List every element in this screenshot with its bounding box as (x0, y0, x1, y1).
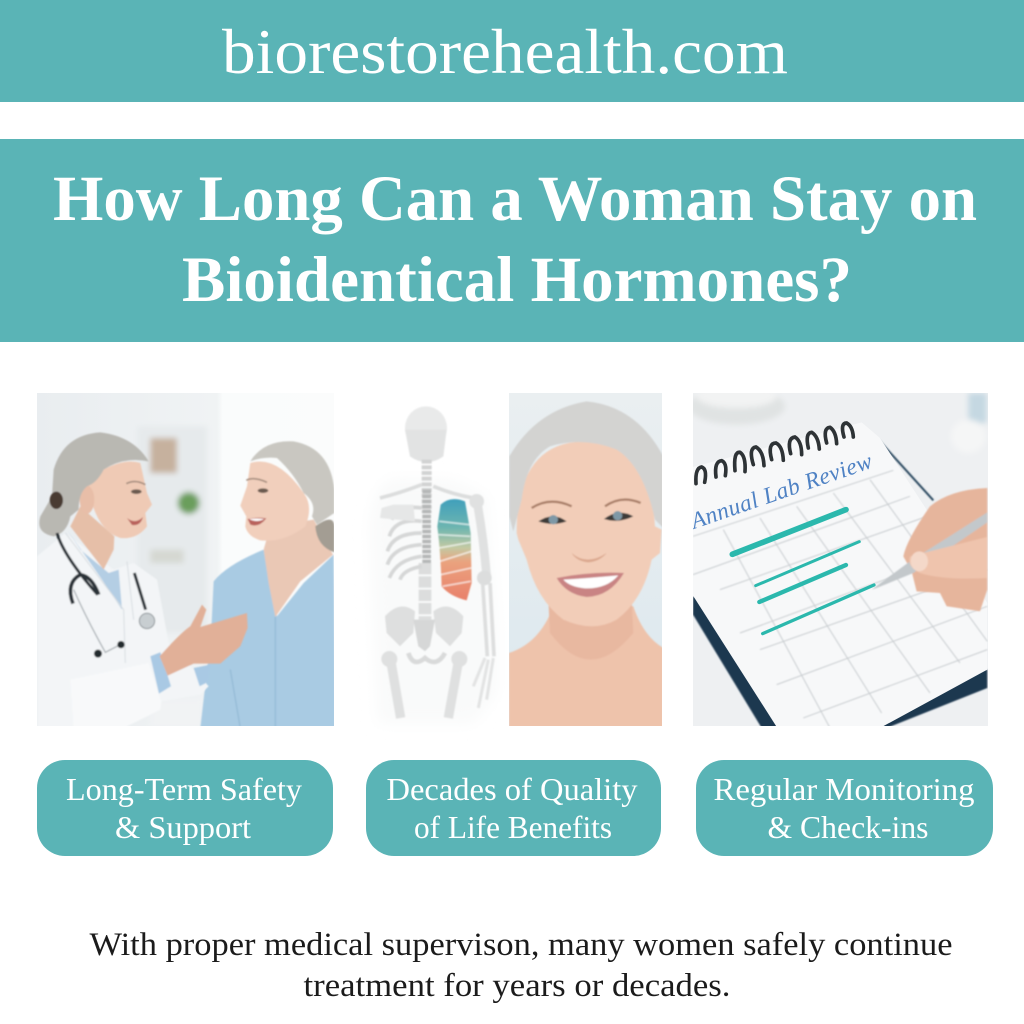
top website banner (0, 0, 1024, 102)
pill: regular monitoring: Regular Monitoring (714, 771, 974, 807)
hand with pen (872, 488, 987, 611)
handwritten label: Annual Lab Review (686, 448, 876, 535)
spiral binding (696, 423, 853, 484)
title banner (0, 139, 1024, 342)
pill: quality of life (366, 760, 661, 856)
pill: long-term safety: & Support (115, 809, 251, 845)
pill: long-term safety (37, 760, 333, 856)
clipboard (693, 440, 987, 728)
bottle (966, 393, 988, 424)
top website banner: biorestorehealth.com (222, 16, 788, 87)
photo: annual lab review calendar (686, 385, 990, 728)
title banner: How Long Can a Woman Stay on (53, 163, 977, 235)
coffee cup (693, 399, 784, 424)
doctor (37, 432, 248, 728)
calendar sheet (693, 422, 987, 728)
title banner: Bioidentical Hormones? (182, 244, 852, 316)
photo: smiling older woman (509, 393, 663, 728)
pill: quality of life: Decades of Quality (386, 771, 638, 807)
patient (200, 441, 335, 728)
facial features (532, 500, 641, 597)
closing statement: treatment for years or decades. (304, 968, 730, 1004)
photo: doctor talking with patient (37, 393, 337, 728)
calendar grid (693, 470, 987, 728)
pill: quality of life: of Life Benefits (414, 809, 612, 845)
pill: long-term safety: Long-Term Safety (66, 771, 302, 807)
highlighted ribs (437, 499, 472, 600)
closing statement (90, 927, 952, 1004)
highlighted lines (732, 510, 874, 634)
closing statement: With proper medical supervison, many women safely continue (90, 927, 952, 963)
pill: regular monitoring: & Check-ins (768, 809, 928, 845)
pill: regular monitoring (696, 760, 993, 856)
illustration: translucent skeleton with highlighted ribs (355, 393, 509, 728)
